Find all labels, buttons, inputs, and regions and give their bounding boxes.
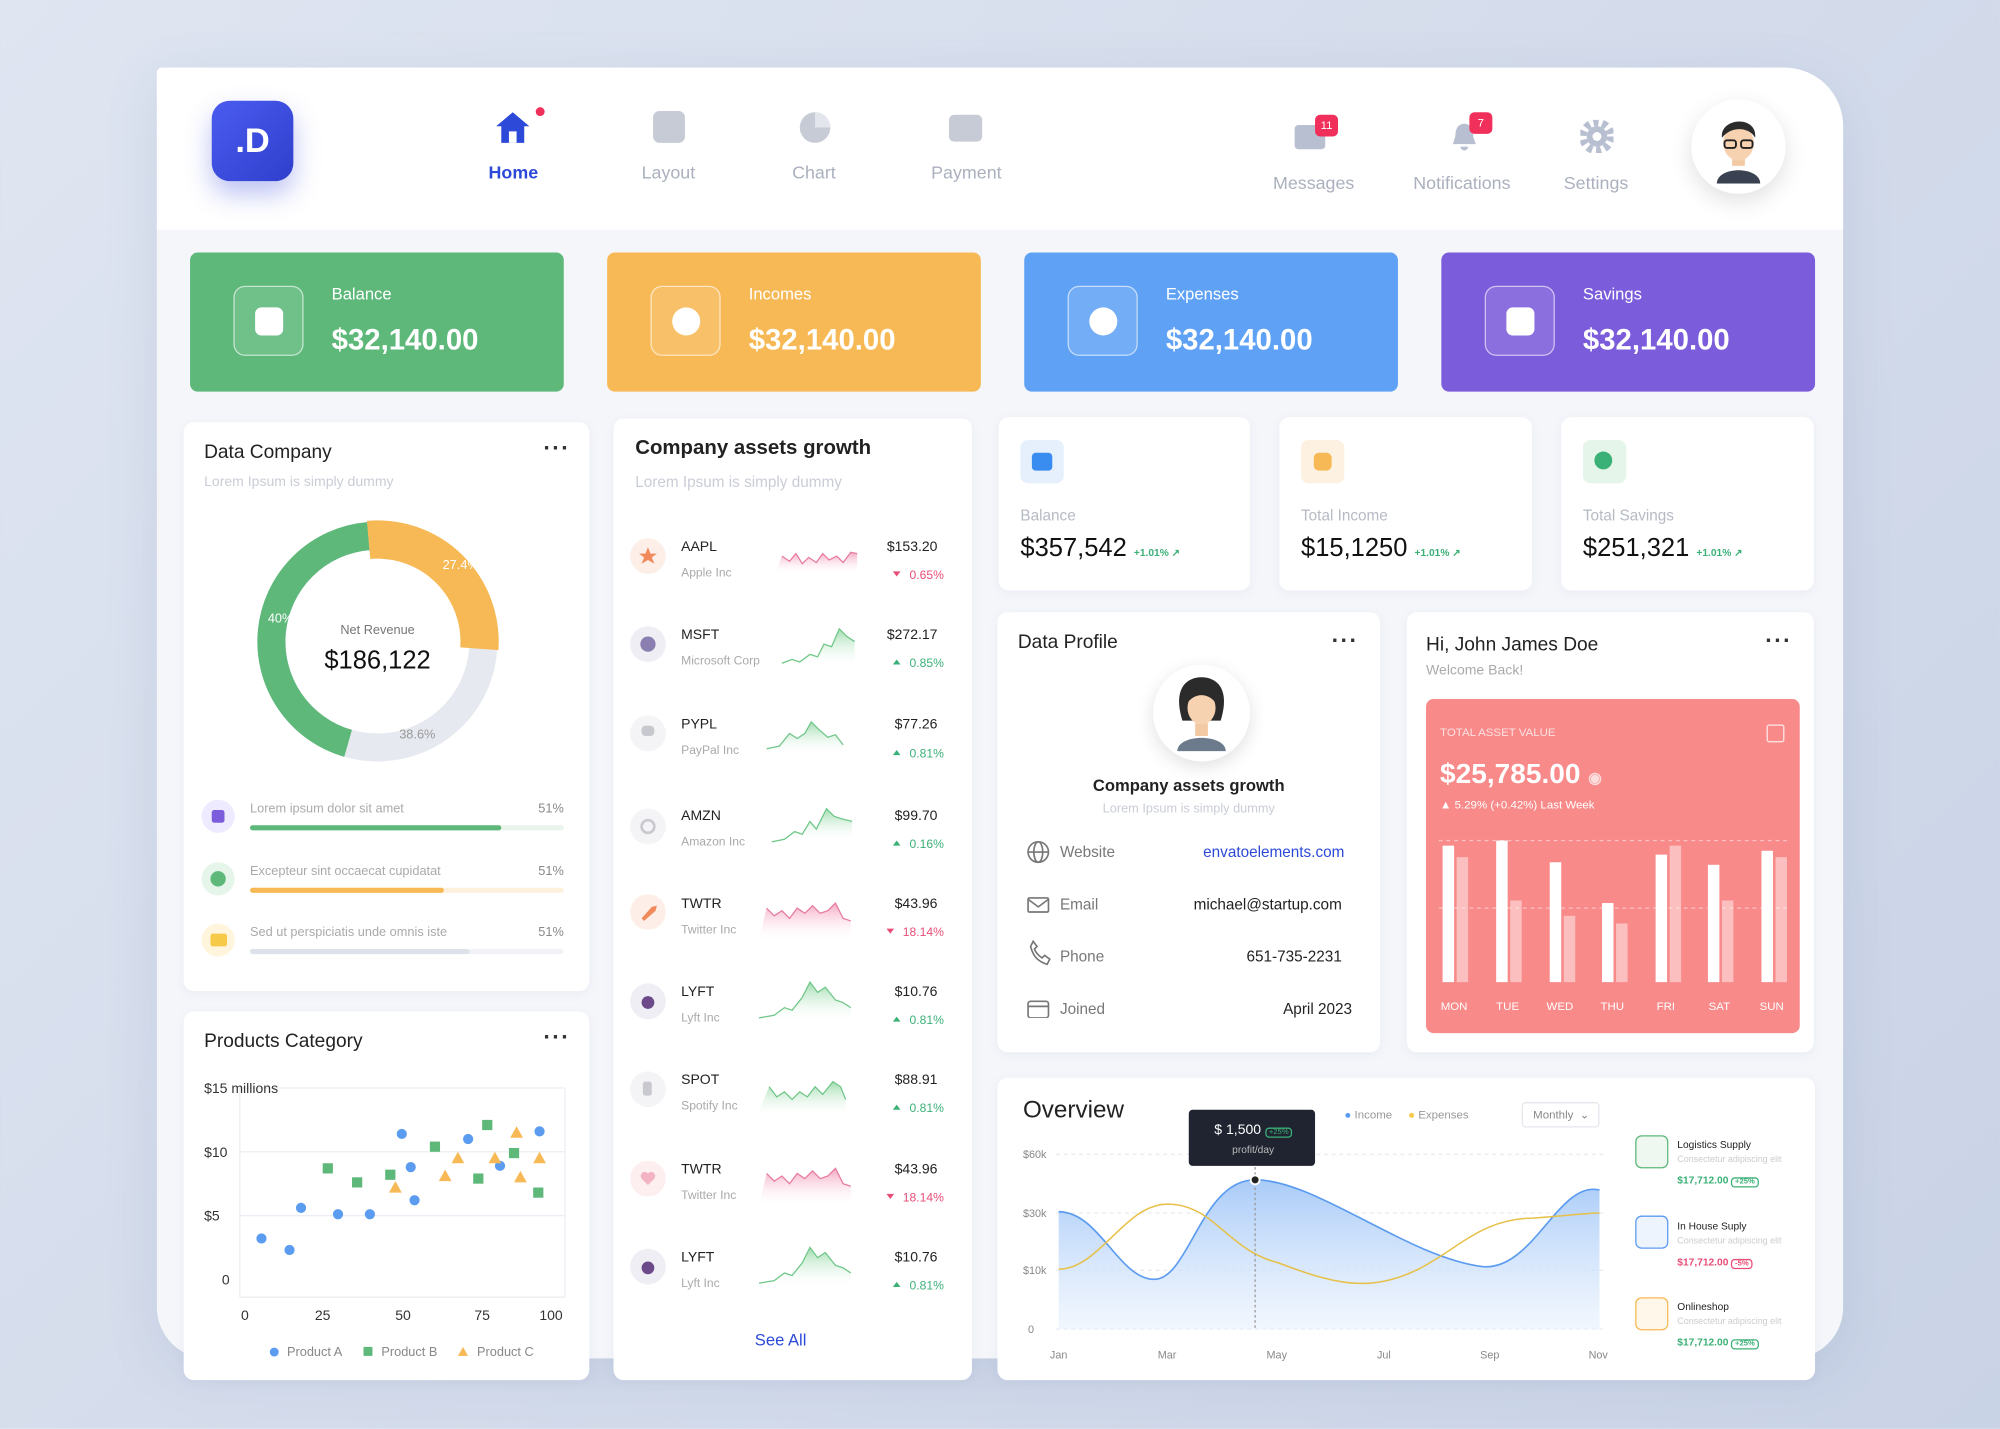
panel: company assets growth: Company assets growth: [635, 437, 871, 459]
progress list: [202, 800, 564, 956]
panel: products category: Products Category: [204, 1031, 363, 1052]
panel: overview: Monthly ⌄: [1533, 1108, 1589, 1121]
stat card: balance: Balance: [332, 284, 392, 304]
panel: data company: Data Company: [204, 441, 332, 463]
small card: balance: Balance: [1020, 506, 1076, 524]
panel: data profile: [997, 612, 1380, 1052]
small card: balance: [999, 417, 1250, 591]
stock list: Microsoft Corp: [681, 654, 760, 668]
profile details: Email: [1060, 895, 1098, 913]
legend: ● Income ● Expenses: [1344, 1108, 1469, 1121]
stock list: $10.76: [895, 1248, 938, 1264]
small card: total income: Total Income: [1301, 506, 1388, 524]
stock list: $43.96: [895, 1160, 938, 1176]
profile details: April 2023: [1283, 1000, 1352, 1018]
stock list: Amazon Inc: [681, 835, 745, 849]
stock list: $99.70: [895, 807, 938, 823]
total asset value card: FRI: [1657, 1001, 1675, 1013]
line chart: Jul: [1377, 1349, 1391, 1361]
stat card: expenses: $32,140.00: [1166, 323, 1313, 356]
stock list: TWTR: [681, 895, 722, 911]
stat card: balance: $32,140.00: [332, 323, 478, 356]
stock list: $10.76: [895, 983, 938, 999]
notifications: Notifications: [1413, 172, 1511, 193]
scatter chart: 0: [241, 1307, 249, 1323]
right list: [1635, 1135, 1782, 1350]
progress list: 51%: [538, 926, 564, 940]
stock list: Twitter Inc: [681, 923, 736, 937]
line chart: [1023, 1149, 1608, 1361]
progress list: Lorem ipsum dolor sit amet: [250, 802, 404, 816]
scatter chart: $15 millions: [204, 1080, 278, 1096]
stat card: savings: [1441, 253, 1815, 392]
panel: data company: [184, 422, 589, 991]
logo: .D: [235, 121, 270, 159]
line chart: $30k: [1023, 1208, 1047, 1220]
stock list: See All: [755, 1331, 806, 1350]
progress list: 51%: [538, 865, 564, 879]
profile details: Joined: [1060, 1000, 1105, 1018]
stock list: Lyft Inc: [681, 1011, 720, 1025]
right list: In House Suply: [1677, 1221, 1747, 1232]
line chart: Mar: [1158, 1349, 1177, 1361]
stat card: balance: [190, 253, 564, 392]
progress list: Sed ut perspiciatis unde omnis iste: [250, 926, 447, 940]
scatter chart: 25: [315, 1307, 331, 1323]
line chart: Nov: [1589, 1349, 1608, 1361]
total asset value card: TOTAL ASSET VALUE: [1440, 726, 1556, 739]
stock list: Twitter Inc: [681, 1188, 736, 1202]
panel: data company: ···: [543, 435, 570, 460]
line chart: $60k: [1023, 1149, 1047, 1161]
right list: $17,712.00 -5%: [1677, 1256, 1749, 1268]
panel: products category: ···: [543, 1024, 570, 1050]
logo: [212, 101, 293, 181]
panel: data profile: Lorem Ipsum is simply dummy: [1103, 802, 1275, 816]
stock list: Spotify Inc: [681, 1099, 738, 1113]
nav: chart: [792, 112, 836, 182]
scatter chart: Product C: [477, 1344, 534, 1359]
panel: hi john: ···: [1765, 628, 1792, 653]
messages: Messages: [1273, 172, 1354, 193]
scatter chart: 50: [395, 1307, 411, 1323]
stat card: expenses: [1024, 253, 1398, 392]
tooltip: $ 1,500 +25%: [1214, 1122, 1289, 1138]
stock list: LYFT: [681, 1248, 715, 1264]
panel: data profile: Company assets growth: [1093, 776, 1285, 795]
stock list: 0.81%: [910, 1279, 944, 1293]
stock list: LYFT: [681, 983, 715, 999]
line chart: Jan: [1050, 1349, 1067, 1361]
donut chart: Net Revenue: [340, 622, 415, 637]
profile details: envatoelements.com: [1203, 843, 1344, 861]
header bar: [157, 68, 1843, 230]
settings: Settings: [1564, 172, 1628, 193]
total asset value card: [1426, 699, 1800, 1033]
nav: home: [489, 107, 545, 182]
panel: data company: Lorem Ipsum is simply dummy: [204, 474, 394, 490]
stock list: 0.81%: [910, 747, 944, 761]
profile details: Website: [1060, 843, 1115, 861]
right list: Consectetur adipiscing elit: [1677, 1156, 1782, 1165]
stat card: savings: $32,140.00: [1583, 323, 1730, 356]
right list: $17,712.00 +25%: [1677, 1175, 1755, 1186]
stat card: incomes: [607, 253, 981, 392]
messages: [1273, 114, 1354, 193]
right list: Logistics Supply: [1677, 1139, 1751, 1151]
scatter chart: [204, 1080, 566, 1359]
stock list: AMZN: [681, 807, 721, 823]
nav: layout: Layout: [642, 162, 695, 182]
right list: Onlineshop: [1677, 1301, 1729, 1312]
stat card: incomes: Incomes: [749, 284, 811, 304]
right list: $17,712.00 +25%: [1677, 1337, 1755, 1348]
donut chart: [257, 520, 499, 762]
progress list: 51%: [538, 802, 564, 816]
stock list: SPOT: [681, 1071, 720, 1087]
stat card: savings: Savings: [1583, 284, 1642, 304]
scatter chart: 100: [539, 1307, 563, 1323]
panel: hi john: Hi, John James Doe: [1426, 634, 1598, 656]
panel: overview: Overview: [1023, 1097, 1124, 1124]
right list: Consectetur adipiscing elit: [1677, 1237, 1782, 1246]
small card: total savings: Total Savings: [1583, 506, 1674, 524]
line chart: $10k: [1023, 1265, 1047, 1277]
total asset value card: SUN: [1760, 1001, 1784, 1013]
panel: data profile: ···: [1332, 628, 1358, 653]
stock list: 0.81%: [910, 1101, 944, 1115]
scatter chart: $10: [204, 1144, 228, 1160]
main dashboard card: [157, 68, 1843, 1358]
donut chart: 40%: [268, 610, 293, 625]
stat card: incomes: $32,140.00: [749, 323, 896, 356]
stock list: 0.65%: [910, 568, 944, 582]
tooltip: [1189, 1110, 1315, 1166]
stock list: TWTR: [681, 1160, 722, 1176]
nav: layout: [642, 111, 696, 182]
stock list: 18.14%: [903, 925, 944, 939]
donut chart: $186,122: [324, 646, 431, 674]
notifications: 7: [1478, 116, 1484, 129]
panel: hi john: Welcome Back!: [1426, 663, 1523, 679]
total asset value card: MON: [1441, 1001, 1467, 1013]
line chart: May: [1267, 1349, 1288, 1361]
total asset value card: $25,785.00 ◉: [1440, 758, 1602, 790]
scatter chart: Product A: [287, 1344, 343, 1359]
stock list: [630, 538, 944, 1350]
stock list: 0.85%: [910, 656, 944, 670]
panel: company assets growth: [614, 418, 972, 1380]
panel: products category: [184, 1011, 589, 1380]
small card: balance: $357,542 +1.01% ↗: [1020, 534, 1180, 562]
stock list: 0.16%: [910, 837, 944, 851]
donut chart: 38.6%: [399, 727, 435, 742]
stock list: AAPL: [681, 538, 717, 554]
nav: payment: Payment: [931, 162, 1002, 182]
total asset value card: THU: [1600, 1001, 1624, 1013]
stock list: 18.14%: [903, 1191, 944, 1205]
stock list: MSFT: [681, 626, 720, 642]
line chart: Sep: [1480, 1349, 1499, 1361]
stock list: PYPL: [681, 715, 717, 731]
donut chart: 27.4%: [443, 557, 479, 572]
messages: 11: [1321, 119, 1332, 131]
total asset value card: TUE: [1496, 1001, 1519, 1013]
total asset value card: WED: [1547, 1001, 1573, 1013]
progress list: Excepteur sint occaecat cupidatat: [250, 865, 441, 879]
line chart: 0: [1028, 1324, 1034, 1336]
tooltip: profit/day: [1232, 1144, 1274, 1156]
stock list: $77.26: [895, 715, 938, 731]
profile avatar: [1153, 665, 1250, 761]
stock list: PayPal Inc: [681, 743, 739, 757]
scatter chart: 0: [222, 1271, 230, 1287]
profile details: 651-735-2231: [1247, 948, 1342, 966]
profile details: michael@startup.com: [1194, 895, 1342, 913]
stock list: $43.96: [895, 895, 938, 911]
small card: total income: $15,1250 +1.01% ↗: [1301, 534, 1461, 562]
small card: total income: [1279, 417, 1532, 591]
settings: [1564, 120, 1628, 193]
total asset value card: ▲ 5.29% (+0.42%) Last Week: [1440, 798, 1594, 811]
stock list: Lyft Inc: [681, 1276, 720, 1290]
notifications: [1413, 112, 1511, 193]
profile details: Phone: [1060, 948, 1104, 966]
scatter chart: Product B: [381, 1344, 437, 1359]
right list: Consectetur adipiscing elit: [1677, 1318, 1782, 1327]
panel: company assets growth: Lorem Ipsum is simply dummy: [635, 473, 842, 491]
stock list: 0.81%: [910, 1013, 944, 1027]
small card: total savings: [1561, 417, 1814, 591]
nav: chart: Chart: [792, 162, 836, 182]
avatar: [1691, 99, 1786, 194]
scatter chart: 75: [474, 1307, 490, 1323]
stat card: expenses: Expenses: [1166, 284, 1239, 304]
panel: hi john: [1407, 612, 1814, 1052]
total asset value card: SAT: [1709, 1001, 1730, 1013]
nav: payment: [931, 114, 1002, 182]
stock list: $153.20: [887, 538, 938, 554]
stock list: $88.91: [895, 1071, 938, 1087]
nav: home: Home: [489, 162, 538, 182]
panel: overview: [997, 1078, 1815, 1380]
scatter chart: $5: [204, 1208, 220, 1224]
profile details: [1027, 841, 1352, 1018]
stock list: $272.17: [887, 626, 938, 642]
small card: total savings: $251,321 +1.01% ↗: [1583, 534, 1743, 562]
panel: data profile: Data Profile: [1018, 631, 1118, 653]
stock list: Apple Inc: [681, 566, 732, 580]
